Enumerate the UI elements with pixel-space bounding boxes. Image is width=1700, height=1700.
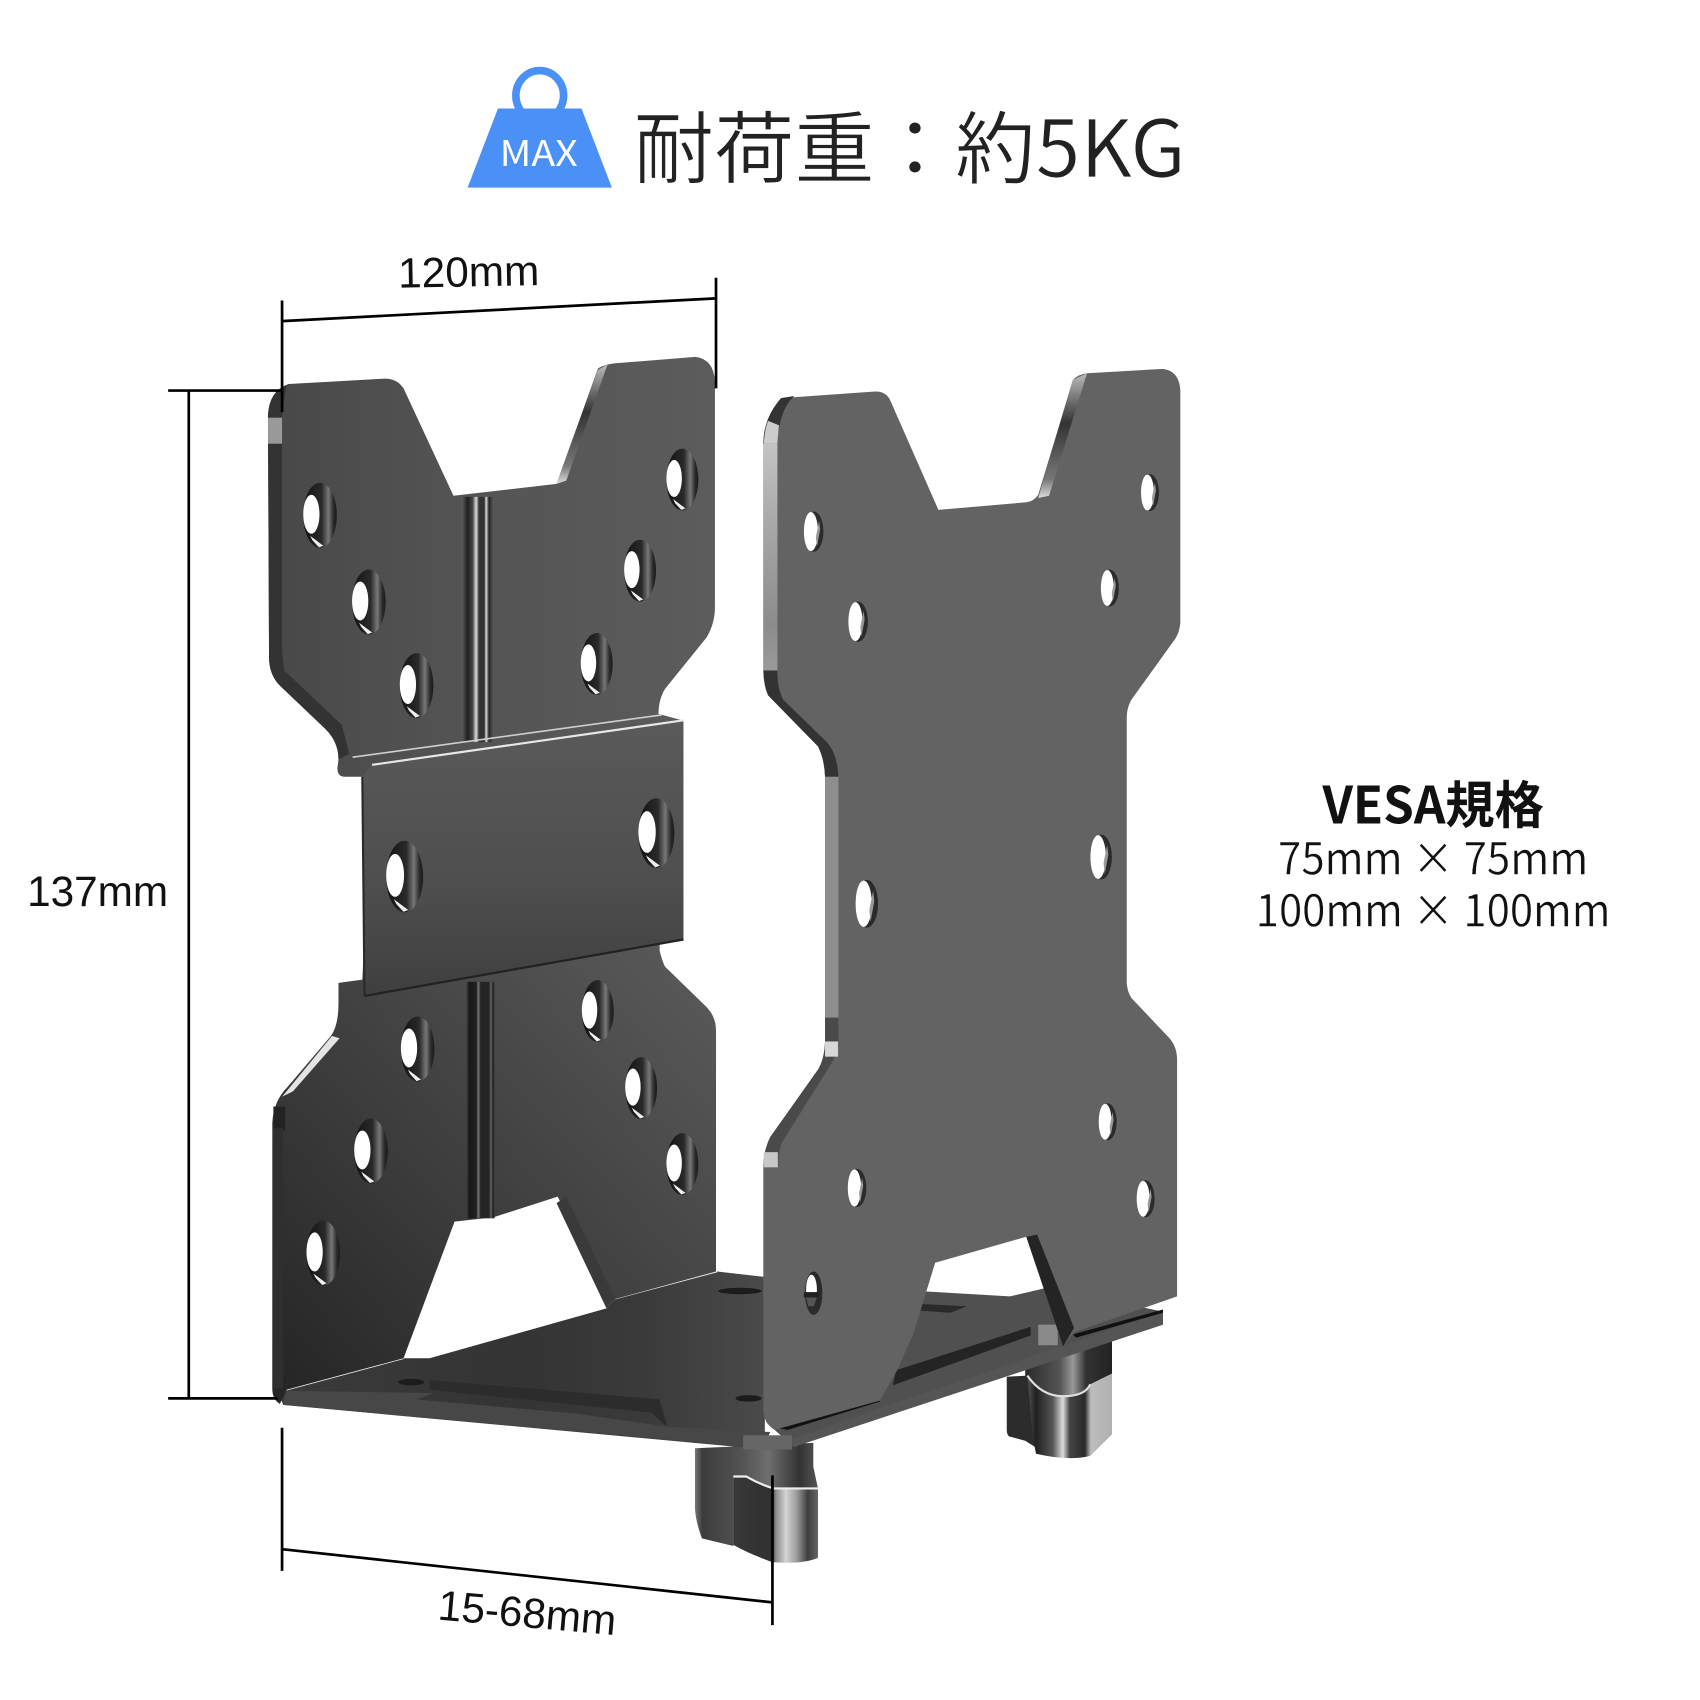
VESA size 100mm: 100mm × 100mm (1256, 874, 1610, 939)
foot: rear clamp screw (1007, 1337, 1112, 1458)
icon: MAX weight (468, 71, 612, 188)
panel: sliding center band (353, 715, 683, 996)
holes: front plate (804, 474, 1159, 1315)
dimension: height 137mm (27, 391, 282, 1398)
rib: lower bend (466, 982, 495, 1218)
text block: VESA standard (1256, 764, 1610, 939)
holes: back plate countersinks (303, 449, 698, 1286)
product: mounting bracket (268, 357, 1180, 1563)
icon: MAX weight: MAX (500, 125, 578, 177)
VESA size 75mm: 75mm × 75mm (1278, 822, 1588, 887)
dimension: clamp range 15-68mm (282, 1428, 772, 1644)
panel: back plate bottom (272, 933, 716, 1404)
rib: upper bend (463, 497, 493, 742)
foot: front clamp screw (695, 1443, 818, 1563)
panel: base plate (280, 1271, 1163, 1449)
panel: front plate (763, 369, 1180, 1430)
title text: 耐荷重：約5KG (634, 85, 1186, 200)
dimension: width 120mm: 120mm (398, 247, 540, 297)
VESA heading: VESA規格 (1321, 764, 1544, 838)
panel: back plate top (268, 357, 715, 825)
dimension: width 120mm (282, 247, 716, 412)
dimension: height 137mm: 137mm (27, 868, 168, 915)
heading: load capacity (468, 71, 1186, 200)
dimension: clamp range 15-68mm: 15-68mm (436, 1582, 618, 1644)
